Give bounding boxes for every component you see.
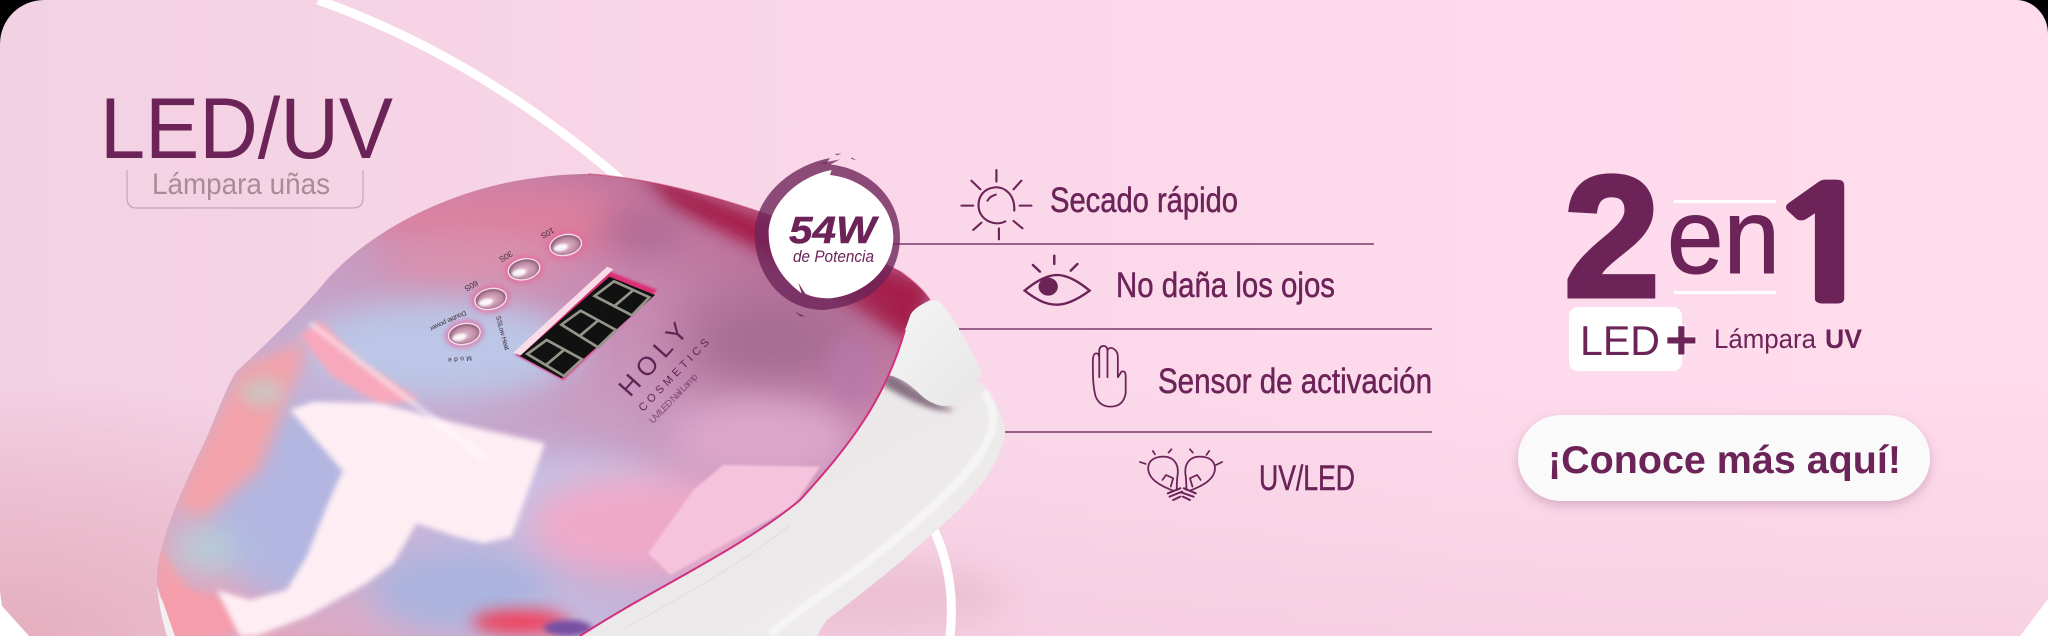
- feature: Secado rápido: Secado rápido: [1050, 181, 1238, 220]
- button labels: Double power: [428, 309, 467, 332]
- button: ¡Conoce más aquí!: ¡Conoce más aquí!: [1548, 439, 1901, 482]
- heading: 2 en 1: 1: [1764, 170, 1886, 323]
- LED + Lámpara UV: UV: [1825, 324, 1862, 354]
- lamp highlights: [217, 323, 545, 636]
- feature divider lines: [892, 244, 1432, 432]
- button labels: 30S: [498, 249, 514, 264]
- icon: bulbs: [1140, 449, 1222, 500]
- feature: No daña los ojos: [1025, 256, 1335, 305]
- LED + Lámpara UV: LED: [1580, 317, 1660, 364]
- icon: hand: [1093, 346, 1126, 407]
- button labels: Mode: [447, 354, 472, 363]
- badge: 54W de Potencia: de Potencia: [793, 248, 874, 266]
- lamp base: [157, 372, 1005, 636]
- subtitle box: Lámpara uñas: [127, 168, 363, 208]
- lamp handle: [888, 300, 982, 406]
- brand: HOLY COSMETICS: COSMETICS: [637, 337, 712, 414]
- badge: 54W de Potencia: 54W: [789, 210, 879, 252]
- brand: HOLY COSMETICS: UV/LED Nail Lamp: [647, 372, 700, 426]
- heading: 2 en 1: en: [1667, 176, 1780, 296]
- feature: Sensor de activación: [1093, 346, 1432, 407]
- brand: HOLY COSMETICS: HOLY: [612, 317, 693, 402]
- title: LED/UV: LED/UV: [100, 81, 393, 177]
- button: ¡Conoce más aquí!: [1518, 415, 1930, 501]
- heading: 2 en 1: 2: [1564, 141, 1660, 333]
- dome magenta rim: [580, 330, 905, 636]
- heading: 2 en 1: [1564, 141, 1886, 333]
- feature: Secado rápido: [961, 170, 1238, 239]
- feature: UV/LED: [1140, 449, 1355, 500]
- button labels: [428, 226, 556, 363]
- subtitle box: Lámpara uñas: Lámpara uñas: [152, 168, 330, 201]
- button labels: 60S: [463, 278, 479, 293]
- brand: HOLY COSMETICS: [612, 317, 712, 426]
- button labels: SSLow Heat: [494, 315, 510, 351]
- control panel: [428, 226, 657, 380]
- button labels: 10S: [539, 226, 556, 240]
- icon: sun: [961, 170, 1031, 239]
- feature: UV/LED: UV/LED: [1259, 459, 1355, 498]
- white arc: [318, 0, 951, 636]
- feature: No daña los ojos: No daña los ojos: [1116, 266, 1335, 305]
- LED + Lámpara UV: Lámpara: [1714, 324, 1817, 354]
- LED + Lámpara UV: +: [1665, 308, 1698, 371]
- lamp dome: [140, 160, 960, 636]
- LED display: [513, 267, 657, 380]
- icon: eye: [1025, 256, 1090, 305]
- badge: 54W de Potencia: [755, 153, 900, 316]
- feature: Sensor de activación: Sensor de activación: [1158, 362, 1432, 401]
- LED + Lámpara UV: [1569, 307, 1862, 371]
- buttons: [443, 228, 587, 351]
- lamp product image: [140, 160, 1005, 636]
